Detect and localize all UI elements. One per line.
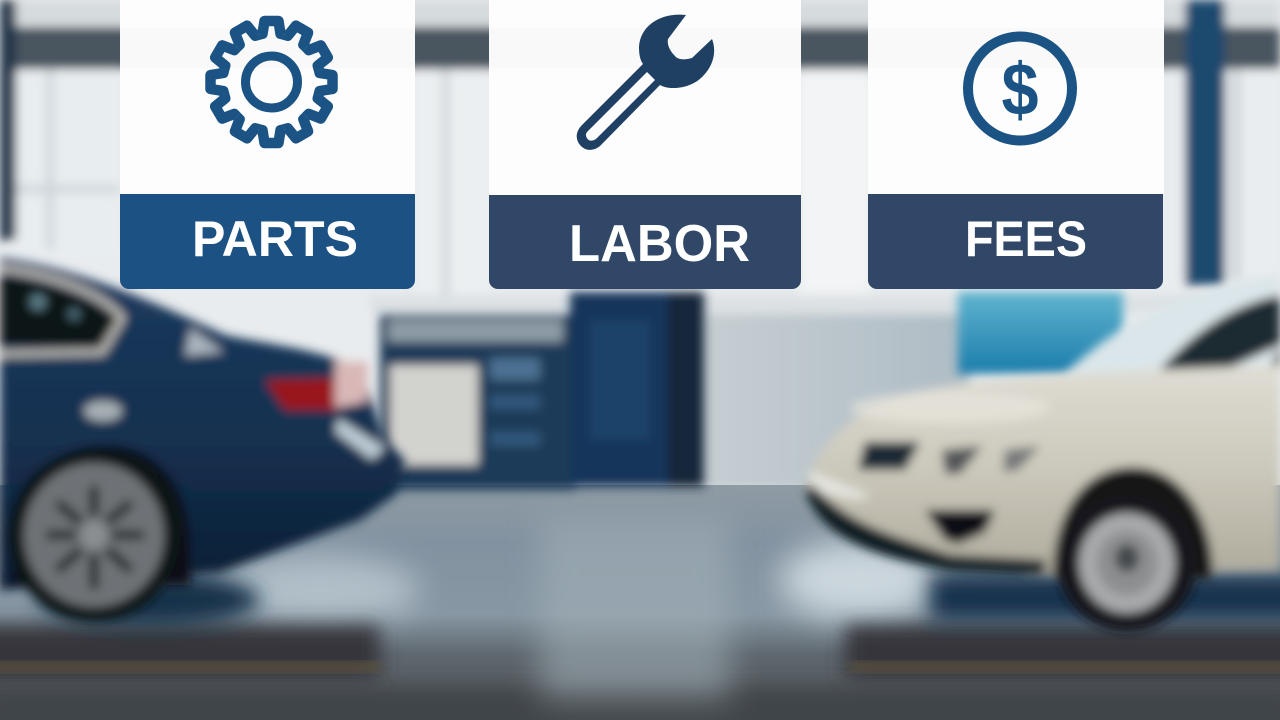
- car: blue sedan: [0, 258, 405, 626]
- equipment: [380, 292, 1123, 490]
- heading: labor: LABOR: [569, 215, 750, 273]
- icon: wrench: [577, 15, 714, 150]
- card: parts: [120, 0, 415, 289]
- heading: parts: PARTS: [192, 211, 358, 267]
- label bar: fees: [868, 194, 1163, 289]
- floor: [0, 485, 1280, 720]
- icon: dollar coin: $: [1001, 48, 1039, 131]
- icon: dollar coin: [968, 36, 1072, 140]
- label bar: labor: [489, 195, 801, 289]
- car: beige sedan: [805, 275, 1280, 631]
- heading: fees: FEES: [965, 211, 1087, 267]
- card: labor: [489, 0, 801, 289]
- icon: gear: [210, 21, 332, 143]
- label bar: parts: [120, 194, 415, 289]
- card: fees: [868, 0, 1164, 289]
